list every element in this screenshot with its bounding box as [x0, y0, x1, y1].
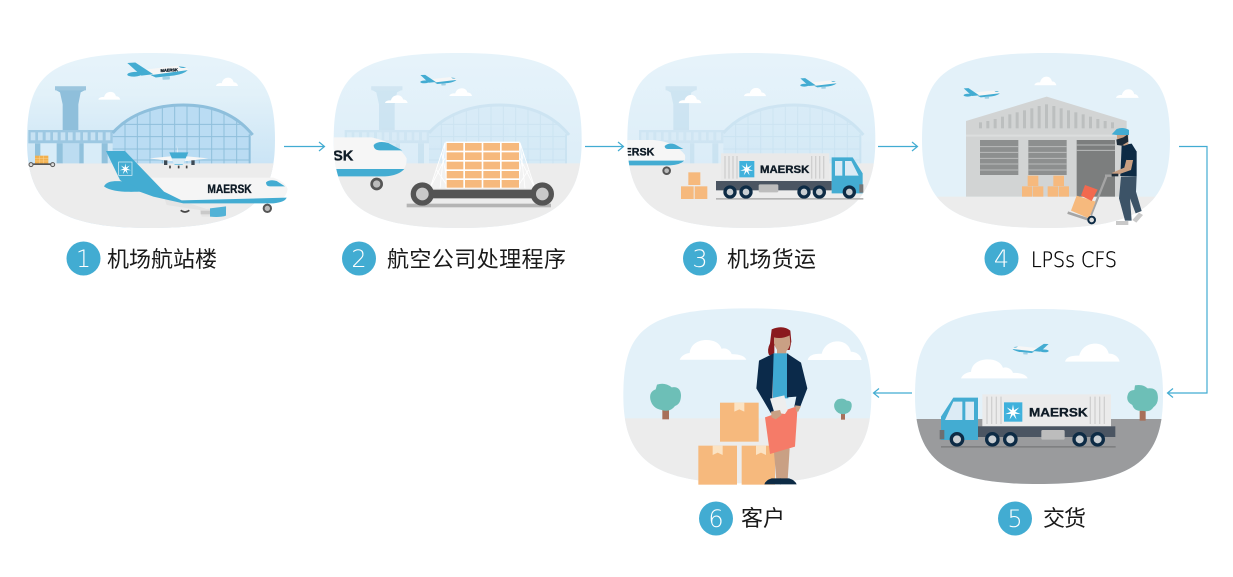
- panel: step 6 customer: [623, 308, 872, 485]
- panel: step 4 LPSs CFS warehouse: [922, 53, 1170, 228]
- icon: plane nose: SK: [333, 149, 354, 165]
- icon: plane in the sky: [1012, 343, 1049, 355]
- icon: stacked boxes: [698, 403, 775, 485]
- icon: clouds: [385, 88, 472, 103]
- icon: warehouse building: [966, 97, 1127, 197]
- icon: left tree: [650, 384, 681, 419]
- icon: clouds: [961, 344, 1120, 378]
- icon: plane in the sky: [420, 74, 457, 86]
- label: step 4: [984, 242, 1117, 276]
- label: step 1: 机场航站楼: [107, 247, 217, 272]
- label: step 6: 客户: [741, 506, 785, 531]
- label: step 5: 5: [1007, 505, 1023, 533]
- icon: customer woman: [756, 327, 807, 484]
- icon: loaded cargo dolly: [407, 142, 551, 207]
- icon: plane nose: [325, 137, 407, 189]
- panel: step 2 airline handling: [334, 53, 582, 228]
- label: step 4: 4: [994, 245, 1009, 273]
- label: step 4: LPSs CFS: [1031, 248, 1117, 273]
- icon: plane nose: [620, 140, 685, 174]
- panel: step 5 delivery: [915, 309, 1163, 484]
- icon: right tree: [834, 399, 852, 420]
- icon: Maersk truck: [716, 153, 863, 200]
- arrow: step 3 to 4: [878, 142, 918, 151]
- icon: baggage cart: [29, 156, 55, 167]
- label: step 2: [342, 242, 566, 276]
- label: step 1: 1: [76, 245, 91, 273]
- icon: plane in the sky: MAERSK: [160, 67, 178, 73]
- icon: plane in the sky: [963, 87, 1001, 100]
- icon: clouds: [98, 78, 238, 100]
- panel: step 3 airport freight: [627, 53, 876, 228]
- icon: worker with hand truck: [1068, 128, 1143, 225]
- icon: stacked boxes: [681, 172, 707, 199]
- icon: Maersk truck: MAERSK: [760, 164, 810, 176]
- icon: stacked boxes: [1022, 176, 1069, 197]
- icon: clouds: [1034, 77, 1139, 98]
- arrow: step 4 to 5: [1168, 146, 1207, 398]
- icon: plane in the sky: [127, 60, 189, 82]
- arrow: step 1 to 2: [284, 142, 324, 151]
- label: step 3: [683, 242, 816, 276]
- label: step 3: 3: [692, 245, 708, 273]
- icon: large Maersk plane: [104, 151, 288, 217]
- icon: plane nose: ERSK: [625, 147, 655, 159]
- label: step 1: [66, 242, 217, 276]
- icon: parked plane front view: [149, 144, 208, 168]
- icon: tree: [1127, 385, 1158, 421]
- label: step 2: 航空公司处理程序: [387, 247, 566, 272]
- icon: clouds: [680, 340, 862, 360]
- label: step 6: 6: [708, 505, 724, 533]
- label: step 5: [998, 502, 1086, 536]
- icon: clouds: [679, 88, 766, 103]
- label: step 6: [699, 502, 785, 536]
- panel: step 1 airport terminal: [20, 53, 288, 237]
- label: step 2: 2: [351, 245, 367, 273]
- icon: Maersk truck: [940, 394, 1116, 448]
- arrow: step 5 to 6: [874, 388, 912, 398]
- label: step 5: 交货: [1043, 506, 1086, 531]
- icon: large Maersk plane: MAERSK: [207, 183, 252, 196]
- icon: plane in the sky: [800, 77, 837, 90]
- arrow: step 2 to 3: [585, 142, 624, 151]
- icon: Maersk truck: MAERSK: [1029, 405, 1088, 419]
- label: step 3: 机场货运: [727, 247, 816, 272]
